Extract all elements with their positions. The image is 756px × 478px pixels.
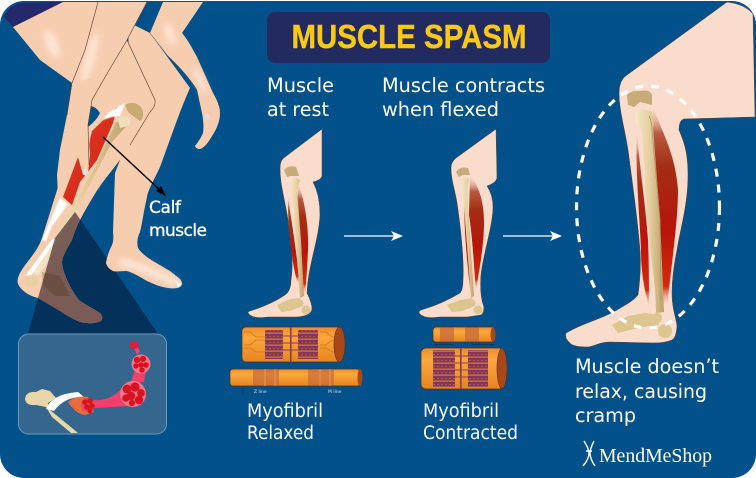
heading: muscle at rest: Muscle — [267, 74, 334, 97]
knee condyles — [627, 90, 652, 107]
soleus — [637, 132, 649, 308]
hand — [57, 75, 105, 195]
z line label: Z line — [254, 389, 267, 395]
upper tendon — [103, 103, 125, 120]
knee bones — [118, 103, 143, 128]
fingernail — [83, 169, 87, 175]
ankle bones — [24, 272, 70, 296]
label: cramp explanation: relax, causing — [575, 380, 707, 403]
z line marker — [242, 387, 244, 394]
tibia and fibula — [635, 110, 664, 313]
arm contour — [150, 33, 197, 90]
standing leg shading — [120, 262, 176, 283]
lower myofibril — [230, 369, 362, 386]
fibre — [130, 341, 138, 349]
ring on back hand — [204, 114, 210, 120]
upper myofibril — [433, 327, 496, 345]
calf muscles — [297, 183, 308, 295]
fibula line — [649, 116, 661, 300]
knee — [456, 168, 470, 177]
fibula highlight — [26, 238, 56, 277]
arm outline — [67, 2, 155, 165]
connecting tissue — [92, 346, 146, 408]
dashed circle highlight — [576, 86, 720, 328]
myofibril contracted — [421, 327, 507, 389]
myofibril relaxed — [230, 327, 362, 395]
arrow to calf — [103, 137, 166, 196]
label: calf muscle: muscle — [149, 221, 207, 241]
leg: cramp — [566, 2, 755, 347]
zoom cone — [28, 212, 158, 334]
muscle fascicle small — [81, 398, 95, 413]
logo icon — [583, 441, 595, 466]
standing leg — [106, 22, 190, 288]
label: myofibril relaxed: Myofibril — [247, 401, 323, 422]
arrow: flexed to cramp — [503, 231, 562, 241]
muscle fascicle medium — [132, 354, 150, 374]
arrow: rest to flexed — [344, 231, 403, 241]
muscle belly — [68, 397, 94, 415]
inset panel — [18, 334, 166, 434]
m line label: M line — [328, 389, 342, 395]
tibia — [461, 178, 474, 298]
knee — [284, 166, 299, 177]
calf muscle — [469, 175, 484, 291]
label: cramp explanation: Muscle doesn’t — [575, 355, 719, 378]
label: calf muscle: Calf — [149, 198, 182, 218]
muscle fascicle large — [120, 381, 146, 407]
front thigh and leg — [13, 2, 155, 323]
foot bones — [447, 298, 482, 314]
foot bones — [612, 313, 672, 338]
shorts — [4, 2, 64, 27]
logo: MendMeShop — [583, 441, 712, 467]
label: myofibril contracted: Contracted — [423, 423, 518, 444]
label: myofibril relaxed: Relaxed — [247, 423, 314, 444]
leg: flexed — [419, 129, 497, 318]
title text: MUSCLE SPASM — [292, 18, 526, 55]
upper myofibril — [242, 327, 345, 362]
heading: muscle at rest: at rest — [267, 98, 329, 121]
illustration: person holding calf — [4, 2, 220, 334]
lower tendon — [42, 198, 68, 241]
tendon — [46, 392, 84, 411]
heading: muscle contracts: Muscle contracts — [382, 74, 545, 97]
gastrocnemius — [652, 105, 678, 307]
calf muscle — [63, 107, 117, 205]
foot bones — [277, 298, 310, 314]
heading: muscle contracts: when flexed — [382, 98, 499, 121]
logo text: MendMeShop — [599, 445, 712, 467]
gap between thigh and calf — [87, 106, 100, 127]
leg: relaxed — [248, 129, 322, 318]
skin highlights — [40, 21, 209, 94]
tibia — [290, 178, 304, 298]
inset: muscle anatomy — [18, 334, 166, 434]
label: myofibril contracted: Myofibril — [423, 401, 499, 422]
title banner — [267, 12, 550, 63]
label: cramp explanation: cramp — [575, 404, 636, 427]
femur — [25, 389, 78, 433]
toe nail on standing foot — [175, 280, 181, 287]
lower myofibril — [421, 348, 507, 389]
back arm — [150, 2, 220, 149]
shin bone — [32, 122, 130, 276]
shaded foot inside cone — [38, 212, 102, 324]
